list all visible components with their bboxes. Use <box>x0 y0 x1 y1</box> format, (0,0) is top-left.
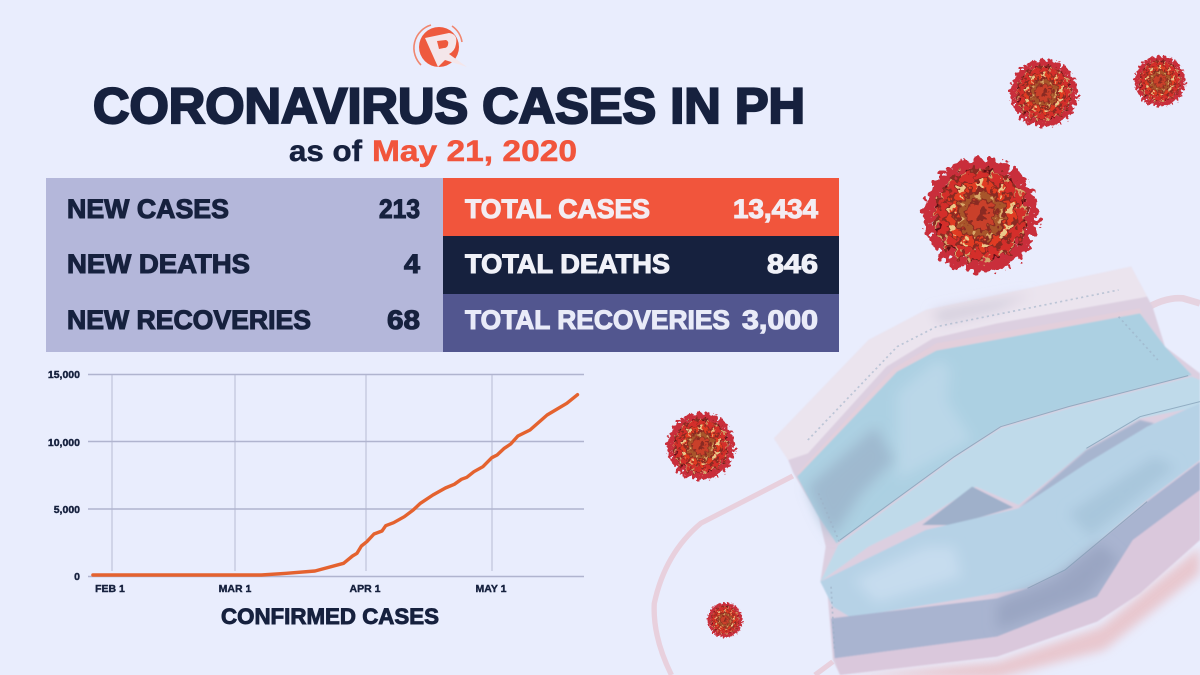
fold shadows <box>922 487 1013 525</box>
new figures rows: 4 <box>404 249 420 279</box>
new figures rows <box>67 194 420 335</box>
inner grey pleat <box>831 462 1200 658</box>
new figures rows: 68 <box>387 305 420 335</box>
panel: new figures <box>46 178 443 352</box>
panel: total deaths: 846 <box>767 249 818 279</box>
blue middle pleat <box>820 377 1200 582</box>
icon: virus top <box>1013 62 1075 124</box>
blue upper pleat <box>797 313 1192 543</box>
axis labels: 10,000 <box>48 437 80 449</box>
subtitle: date: May 21, 2020 <box>372 135 577 168</box>
axis labels: FEB 1 <box>95 583 125 595</box>
subtitle: date <box>289 135 577 168</box>
new figures rows: 213 <box>379 194 420 224</box>
axis labels: MAY 1 <box>476 583 507 595</box>
new figures rows: NEW DEATHS <box>67 249 250 279</box>
new figures rows: NEW RECOVERIES <box>67 305 311 335</box>
illustration: surgical mask <box>654 267 1200 675</box>
stitching <box>808 290 1158 650</box>
mask shadow <box>840 547 1200 675</box>
panel: total recoveries: TOTAL RECOVERIES <box>465 305 730 335</box>
panel: total deaths: TOTAL DEATHS <box>465 249 670 279</box>
axis labels: 15,000 <box>48 369 80 381</box>
logo: Rappler <box>414 25 467 67</box>
title: CORONAVIRUS CASES IN PH <box>93 78 805 134</box>
subtitle: date: as of <box>289 135 363 168</box>
panel: total recoveries: 3,000 <box>742 305 818 335</box>
pleat crease lines <box>840 376 1200 588</box>
panel: total cases <box>443 178 839 236</box>
panel: total recoveries <box>443 294 839 352</box>
icon: virus top right <box>1137 58 1183 104</box>
line chart: confirmed cases <box>48 369 584 595</box>
panel: total cases: TOTAL CASES <box>465 194 650 224</box>
axis labels: APR 1 <box>350 583 381 595</box>
new figures rows: NEW CASES <box>67 194 229 224</box>
bottom pink hem <box>835 490 1200 675</box>
chart caption: CONFIRMED CASES <box>221 604 439 629</box>
blue lower pleat <box>820 403 1200 617</box>
ear loops <box>654 476 833 675</box>
icon: virus small <box>709 604 741 636</box>
axis labels: MAR 1 <box>219 583 251 595</box>
panel: total cases: 13,434 <box>733 194 818 224</box>
axis labels <box>48 369 507 595</box>
panel: total deaths <box>443 236 839 294</box>
outer pink fabric <box>774 267 1200 675</box>
axis labels: 5,000 <box>54 504 80 516</box>
icon: virus middle <box>670 415 732 477</box>
icon: virus large <box>928 162 1034 268</box>
axis labels: 0 <box>74 571 80 583</box>
data line <box>93 395 578 575</box>
